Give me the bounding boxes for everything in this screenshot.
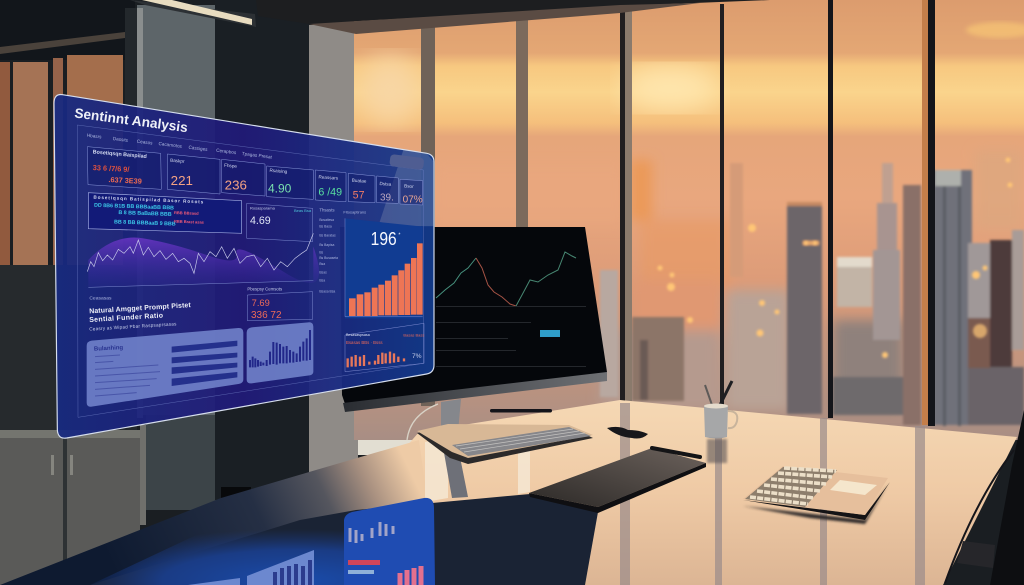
holographic dashboard panel: 57 — [353, 189, 365, 201]
small metric card — [247, 203, 313, 242]
KPI card headings: Buatae — [352, 178, 367, 184]
KPI card headings — [92, 149, 414, 189]
desk reflection of dashboard — [188, 498, 435, 585]
KPI card headings: Dstsa — [379, 181, 392, 187]
lower-right mini chart card: Bsasas BBs · Bsss — [346, 340, 383, 345]
sentiment table card: RBB Brast asas — [174, 219, 205, 225]
vertical item list: Bs Bapisa — [319, 243, 334, 247]
KPI card headings: Reassars — [318, 174, 339, 181]
shadow at front of desk — [90, 494, 598, 585]
holographic dashboard panel: 4.90 — [268, 181, 292, 195]
vertical item list: Bosatiesa — [319, 218, 334, 222]
dashboard tabs: Dassits — [113, 136, 129, 143]
bar chart: * — [398, 233, 400, 239]
monitor blue button — [540, 330, 560, 337]
dashboard tabs: Cacamotos — [158, 141, 183, 149]
glass desk left side — [0, 440, 430, 585]
window mullions — [421, 0, 935, 426]
laptop — [743, 466, 890, 524]
lower-right mini chart card: Besasaspsasa — [346, 333, 371, 337]
sentiment table card: RBB BBsasd — [174, 210, 199, 216]
forecast metric card: 7.69 — [252, 298, 270, 308]
holographic dashboard panel — [54, 95, 434, 438]
window with sunset sky — [354, 0, 1024, 440]
KPI card headings: Bsor — [404, 183, 414, 189]
vertical item list — [319, 208, 366, 293]
dashboard tabs: Hbasrs — [87, 133, 102, 140]
natural language summary text: Sential Funder Ratio — [89, 312, 163, 324]
forecast metric card: 336 72 — [251, 310, 282, 321]
notebook tablet — [529, 448, 706, 513]
sentiment table card: Bosetiqsqn Batispilad Basor Rosots — [93, 195, 204, 204]
holographic dashboard panel: 221 — [171, 173, 193, 188]
dashboard tabs: Tpagas Presat — [242, 151, 273, 160]
KPI card headings: Bosetiqsqn Baispilad — [92, 149, 147, 160]
vertical item list: Bs — [319, 250, 324, 254]
vertical item list: Bs Busaseta — [319, 256, 338, 260]
bar chart — [345, 218, 423, 318]
dashboard tabs — [87, 133, 273, 160]
holographic dashboard panel: 39. — [380, 193, 394, 204]
vertical item list: Bsa — [319, 262, 325, 266]
sentiment table card: DD 8B6 B1B BB BBBaaBB BBB — [94, 203, 174, 211]
sentiment table card: BB 8 BB BBBaaB 9 BBB — [114, 219, 176, 227]
dashboard tabs: Cerapbos — [216, 148, 237, 155]
KPI card headings: Rsaising — [269, 168, 288, 174]
KPI card values: .637 3E39 — [108, 175, 142, 186]
small metric card: 4.69 — [250, 215, 271, 227]
natural language summary text: Natural Amgget Prompt Pistet — [89, 302, 192, 315]
KPI card values — [93, 163, 142, 186]
dashboard title: Sentinnt Analysis — [74, 105, 189, 135]
ceiling — [130, 0, 770, 34]
pen on desk — [490, 409, 552, 412]
vertical item list: Bs Basa — [319, 224, 332, 228]
dashboard tabs: Ceasos — [137, 139, 153, 146]
vertical item list: Bsas — [319, 270, 327, 274]
monitor price chart — [436, 252, 576, 306]
mug with pens — [704, 381, 737, 463]
desk — [0, 400, 1017, 585]
search control — [389, 154, 424, 170]
holographic dashboard panel: 6 /49 — [318, 187, 342, 199]
KPI card headings: Fhspe — [224, 163, 238, 169]
small metric card: Beas Bsa — [294, 208, 312, 213]
lower-right mini chart card: Basas Bass — [403, 333, 424, 338]
info card light — [87, 328, 243, 407]
vertical item list: Bs Baratas — [319, 234, 336, 238]
dashboard tabs: Cassiges — [188, 145, 208, 152]
forecast metric card: Pbespsy Cemsots — [247, 287, 282, 292]
monitor base with keyboard — [417, 424, 593, 464]
natural language summary text: Ceasasas — [89, 295, 112, 301]
vertical item list: Bsa — [319, 279, 325, 283]
KPI card values: 33 6 /7/6 9/ — [93, 163, 130, 174]
bar chart headline value: 196 — [371, 228, 397, 249]
natural language summary text — [89, 295, 192, 332]
vertical item list: Bsasa Bsa — [319, 289, 335, 293]
light bar chart card — [247, 322, 313, 383]
KPI cards — [87, 147, 423, 205]
forecast metric card — [247, 287, 313, 321]
sentiment table card: B 8 BB BaBaBB BBB — [118, 210, 172, 218]
vertical item list: Thsasts — [319, 208, 334, 213]
small metric card: Rosasparama — [250, 205, 276, 210]
holographic dashboard panel: 236 — [225, 178, 247, 193]
KPI card headings: Baskpr — [170, 158, 185, 164]
monitor — [340, 227, 607, 440]
natural language summary text: Ceasry as Wipad Pbar Raspsaprsasas — [89, 321, 177, 332]
vertical item list: Fitosaptirans — [343, 209, 366, 214]
lower-right mini chart card: 7% — [412, 353, 422, 360]
lower-right mini chart card — [345, 323, 424, 372]
info card light: Bulanhing — [94, 345, 124, 353]
mouse — [607, 427, 648, 438]
monitor stand — [441, 399, 461, 436]
sentiment table card — [88, 193, 242, 233]
holographic dashboard panel: 07% — [403, 194, 423, 205]
foreground chair — [945, 410, 1024, 585]
blurred city skyline — [434, 150, 1024, 426]
sentiment line chart — [87, 233, 319, 287]
